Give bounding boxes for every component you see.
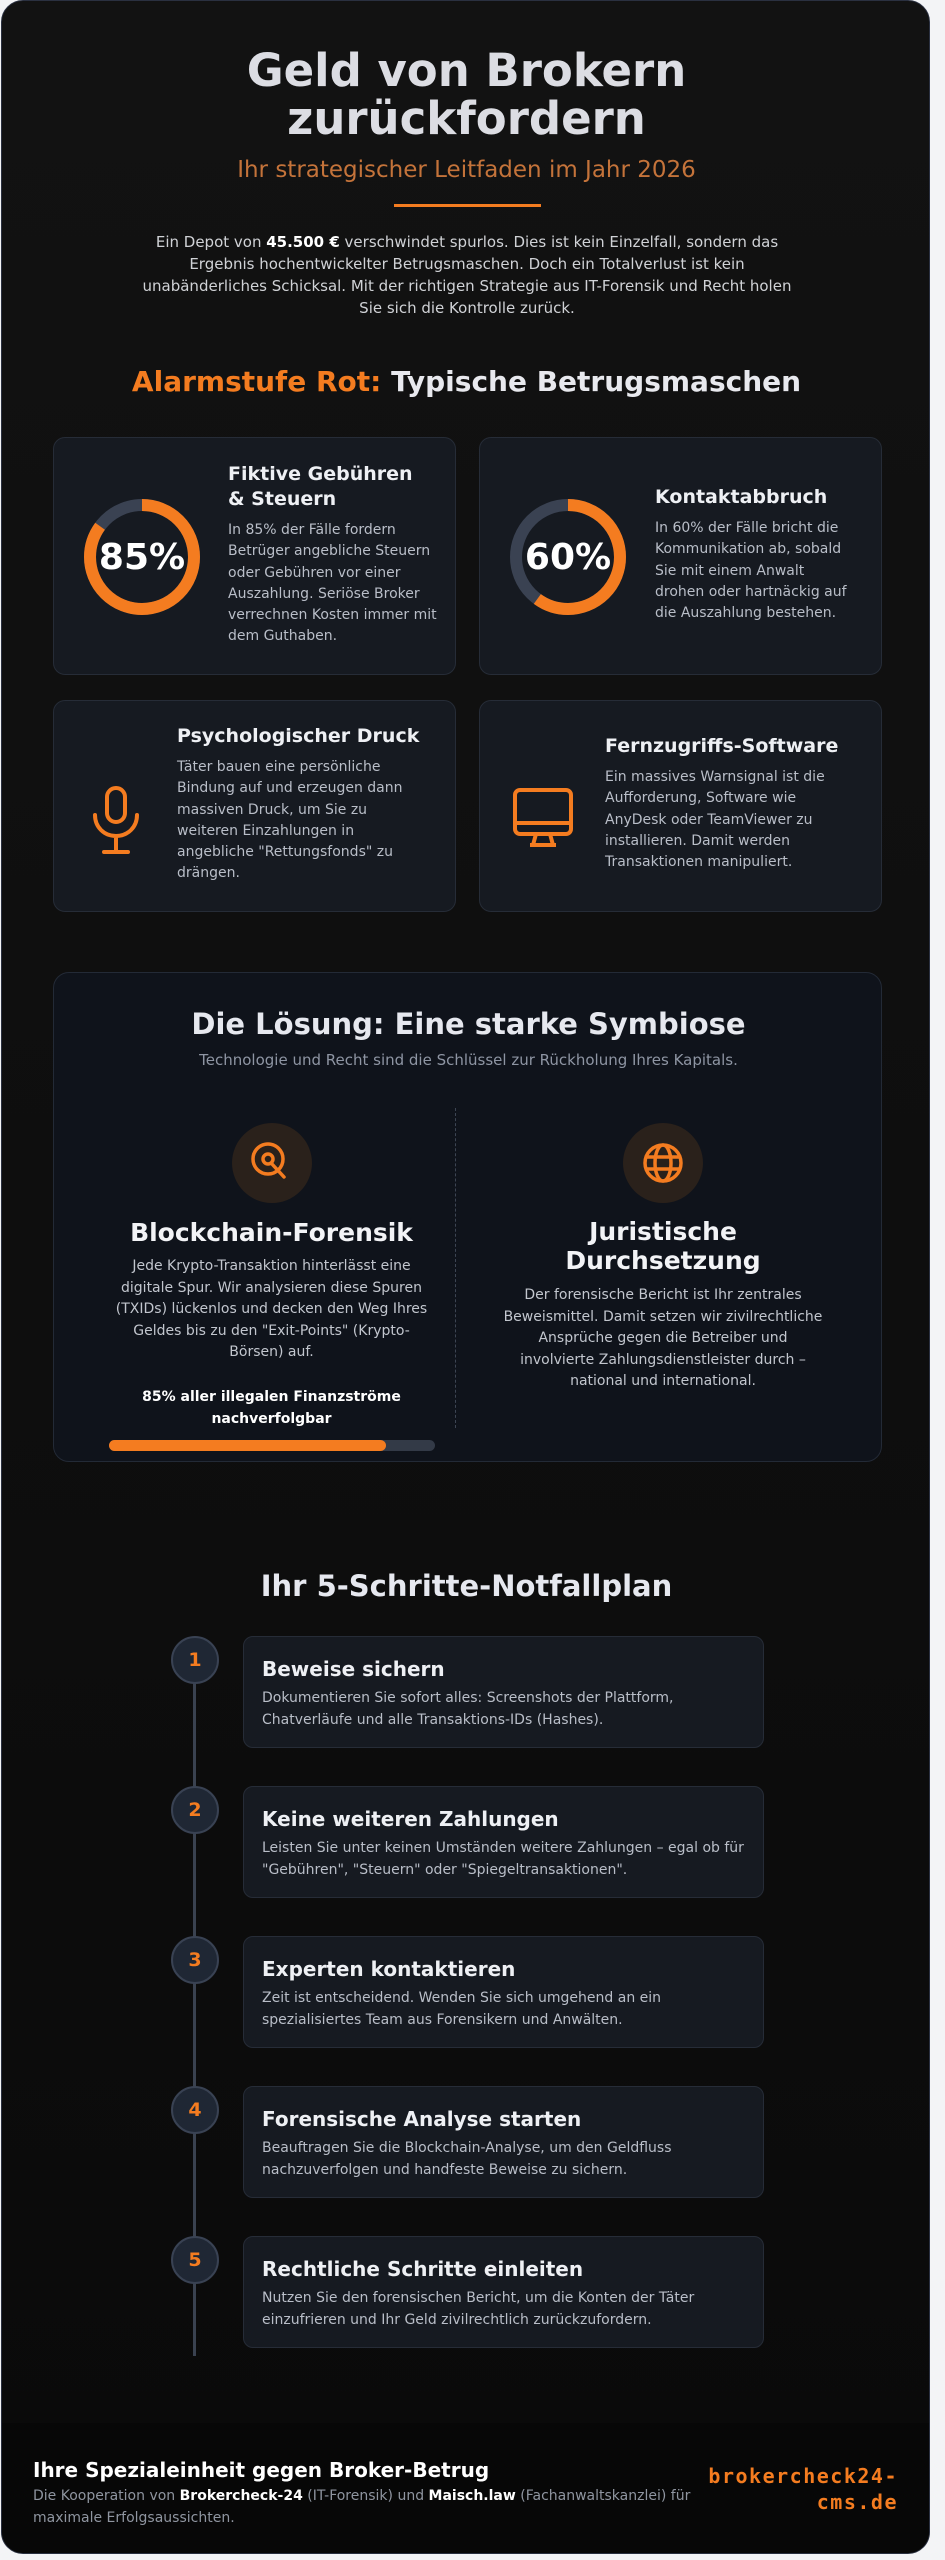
text: Fiktive Gebühren: [228, 463, 413, 485]
step 1: [171, 1636, 219, 1684]
step 2: [171, 1786, 219, 1834]
footer text: Die Kooperation von Brokercheck-24 (IT-Forensik) und Maisch.law (Fachanwaltskanzlei) für maximale Erfolgsaussichten.: [33, 2488, 690, 2526]
subheading: Technologie und Recht sind die Schlüssel zur Rückholung Ihres Kapitals.: [199, 1051, 738, 1069]
column: blockchain forensik: [109, 1123, 435, 1451]
main card: Keine weiteren Zahlungen: [262, 1807, 559, 1831]
text: Täter bauen eine persönliche Bindung auf und erzeugen dann massiven Druck, um Sie zu weiteren Einzahlungen in angebliche "Rettungsfonds" zu drängen.: [177, 759, 402, 881]
text: In 60% der Fälle bricht die Kommunikation ab, sobald Sie mit einem Anwalt drohen oder hartnäckig auf die Auszahlung bestehen.: [655, 520, 847, 621]
text: In 85% der Fälle fordern Betrüger angebliche Steuern oder Gebühren vor einer Auszahlung. Seriöse Broker verrechnen Kosten immer mit dem Guthaben.: [228, 522, 437, 644]
column: juristische durchsetzung: Durchsetzung: [565, 1246, 761, 1275]
column: juristische durchsetzung: Juristische: [589, 1217, 737, 1246]
column: juristische durchsetzung: [504, 1123, 822, 1389]
donut 60%: [510, 499, 626, 615]
footer url: [708, 2464, 898, 2514]
step 4: 4: [188, 2099, 202, 2121]
orange divider: [394, 204, 541, 207]
icon: monitor: [513, 788, 573, 847]
text: Fernzugriffs-Software: [605, 735, 838, 757]
donut 60%: 60%: [525, 537, 611, 578]
section heading: alarm: Alarmstufe Rot: Typische Betrugsmaschen: [132, 365, 801, 398]
panel: kontaktabbruch: [479, 437, 882, 675]
title: zurückfordern: [287, 92, 646, 145]
text: Ein massives Warnsignal ist die Aufforderung, Software wie AnyDesk oder TeamViewer zu installieren. Damit werden Transaktionen manipuliert.: [605, 769, 825, 870]
panel: solution: [53, 972, 882, 1462]
main card: Rechtliche Schritte einleiten: [262, 2257, 583, 2281]
step 5: [171, 2236, 219, 2284]
donut 85%: [84, 499, 200, 615]
main card: Beauftragen Sie die Blockchain-Analyse, um den Geldfluss nachzuverfolgen und handfeste Beweise zu sichern.: [262, 2140, 672, 2178]
footer text: [33, 2458, 690, 2526]
step 1: 1: [188, 1649, 202, 1671]
step 4: [171, 2086, 219, 2134]
column: juristische durchsetzung: Der forensische Bericht ist Ihr zentrales Beweismittel. Damit setzen wir zivilrechtliche Ansprüche gegen die Betreiber und involvierte Zahlungsdienstleister durch – national und international.: [504, 1287, 822, 1389]
main card: Forensische Analyse starten: [262, 2107, 581, 2131]
title: [247, 44, 686, 145]
subtitle: Ihr strategischer Leitfaden im Jahr 2026: [237, 157, 696, 183]
main card: Beweise sichern: [262, 1657, 445, 1681]
main card: Experten kontaktieren: [262, 1957, 515, 1981]
step 3: 3: [188, 1949, 202, 1971]
progress bar: [108, 1440, 434, 1450]
step 3: [171, 1936, 219, 1984]
text: & Steuern: [228, 488, 336, 510]
intro text: Ein Depot von 45.500 € verschwindet spurlos. Dies ist kein Einzelfall, sondern das Ergebnis hochentwickelter Betrugsmaschen. Doch ein Totalverlust ist kein unabänderliches Schicksal. Mit der richtigen Strategie aus IT-Forensik und Recht holen Sie sich die Kontrolle zurück.: [143, 233, 791, 317]
icon: search: [232, 1123, 312, 1203]
title: Geld von Brokern: [247, 44, 686, 97]
footer url: cms.de: [817, 2490, 898, 2514]
column: blockchain forensik: Jede Krypto-Transaktion hinterlässt eine digitale Spur. Wir analysieren diese Spuren (TXIDs) lückenlos und decken den Weg Ihres Geldes bis zu den "Exit-Points" (Krypto-Börsen) auf.: [116, 1258, 427, 1360]
text: Kontaktabbruch: [655, 486, 827, 508]
footer: [2, 2423, 931, 2555]
panel: psychologischer druck: [53, 700, 456, 912]
heading: Die Lösung: Eine starke Symbiose: [191, 1007, 746, 1041]
icon: microphone: [93, 786, 139, 854]
step 2: 2: [188, 1799, 202, 1821]
panel: fiktive gebuehren: [53, 437, 456, 675]
heading: notfallplan: Ihr 5-Schritte-Notfallplan: [261, 1569, 672, 1603]
panel: fernzugriff: [479, 700, 882, 912]
footer text: Ihre Spezialeinheit gegen Broker-Betrug: [33, 2458, 489, 2482]
column: blockchain forensik: 85% aller illegalen Finanzströme: [142, 1388, 401, 1404]
main card: Zeit ist entscheidend. Wenden Sie sich umgehend an ein spezialisiertes Team aus Forensikern und Anwälten.: [262, 1990, 661, 2028]
column: blockchain forensik: nachverfolgbar: [211, 1410, 332, 1426]
text: Psychologischer Druck: [177, 725, 419, 747]
main card: Leisten Sie unter keinen Umständen weitere Zahlungen – egal ob für "Gebühren", "Steuern" oder "Spiegeltransaktionen".: [262, 1840, 744, 1878]
column: blockchain forensik: Blockchain-Forensik: [130, 1218, 413, 1247]
step 5: 5: [188, 2249, 202, 2271]
footer url: brokercheck24-: [708, 2464, 898, 2488]
donut 85%: 85%: [99, 537, 185, 578]
icon: globe: [623, 1123, 703, 1203]
main card: Nutzen Sie den forensischen Bericht, um die Konten der Täter einzufrieren und Ihr Geld zivilrechtlich zurückzufordern.: [262, 2290, 694, 2328]
text: [228, 463, 437, 644]
main card: Dokumentieren Sie sofort alles: Screenshots der Plattform, Chatverläufe und alle Transaktions-IDs (Hashes).: [262, 1690, 674, 1728]
